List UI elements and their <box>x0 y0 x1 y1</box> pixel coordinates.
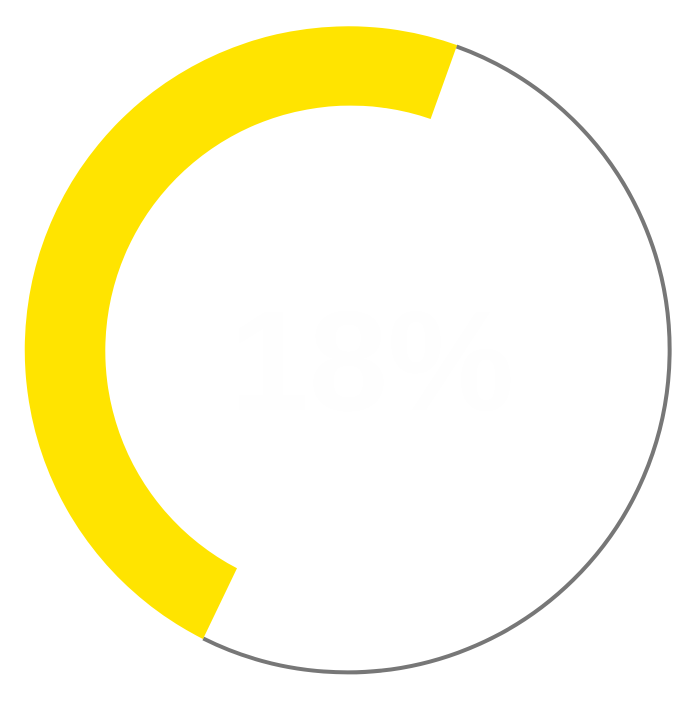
center value, near-white: 18% <box>230 282 514 441</box>
gray track arc <box>203 46 670 672</box>
yellow value arc <box>25 26 457 639</box>
